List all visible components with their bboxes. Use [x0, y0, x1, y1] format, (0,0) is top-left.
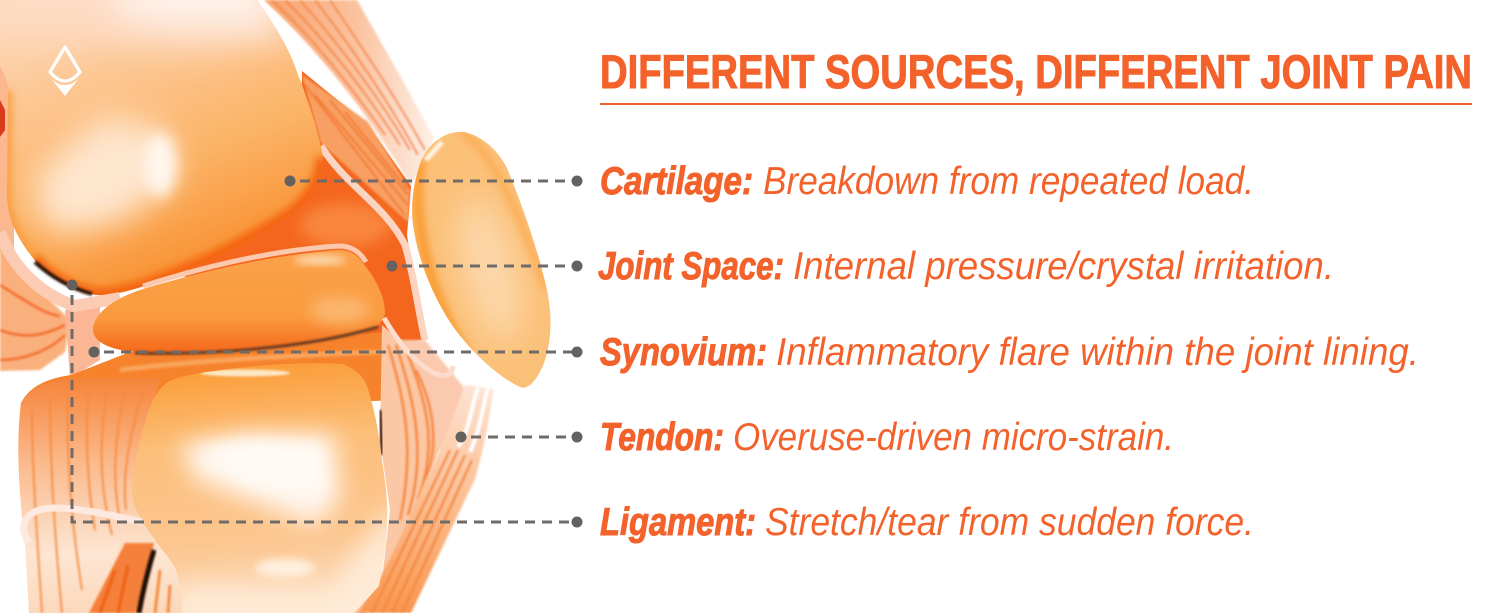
tissue beneath femur — [65, 300, 100, 378]
right muscle group — [350, 325, 439, 613]
left muscle lobe — [0, 245, 70, 371]
lower tendon — [358, 385, 493, 613]
collateral band under femur — [0, 232, 120, 306]
callout: ligament: Stretch/tear from sudden force. — [765, 501, 1254, 544]
callout: cartilage: Cartilage: — [600, 160, 753, 203]
callout: synovium: Synovium: — [600, 331, 767, 374]
callout: ligament: Ligament: — [600, 501, 756, 544]
title underline — [600, 103, 1472, 105]
femur — [0, 0, 323, 295]
tissue beneath patella — [385, 340, 470, 452]
callout: joint space: Joint Space: — [598, 245, 784, 288]
callout: joint space: Internal pressure/crystal irritation. — [793, 245, 1334, 288]
callout: ligament — [66, 280, 1254, 544]
lower left muscles — [18, 378, 195, 613]
dark crease — [35, 262, 92, 294]
tibial plateau band — [21, 332, 395, 412]
upper tendon bundle — [264, 0, 434, 186]
synovium membrane — [321, 146, 425, 340]
tibia — [132, 363, 400, 613]
callout: tendon: Tendon: — [600, 416, 724, 459]
callout: joint space — [386, 245, 1334, 288]
left edge sliver — [0, 100, 5, 137]
patella — [412, 132, 551, 388]
inner muscle fibres — [302, 75, 410, 222]
callout: tendon — [456, 416, 1174, 459]
patellar ligament loop — [384, 318, 453, 375]
knee anatomy illustration — [0, 0, 551, 613]
deep joint tissue — [180, 71, 424, 345]
callout: synovium — [88, 331, 1419, 374]
callout: cartilage: Breakdown from repeated load. — [763, 160, 1254, 203]
callout: tendon: Overuse-driven micro-strain. — [733, 416, 1174, 459]
callout: cartilage — [284, 160, 1254, 203]
ligament band — [24, 508, 142, 543]
logo icon — [50, 47, 80, 96]
meniscus — [93, 246, 385, 353]
callout: synovium: Inflammatory flare within the joint lining. — [776, 331, 1419, 374]
dark joint line — [135, 327, 378, 353]
left edge tissue — [0, 62, 14, 252]
